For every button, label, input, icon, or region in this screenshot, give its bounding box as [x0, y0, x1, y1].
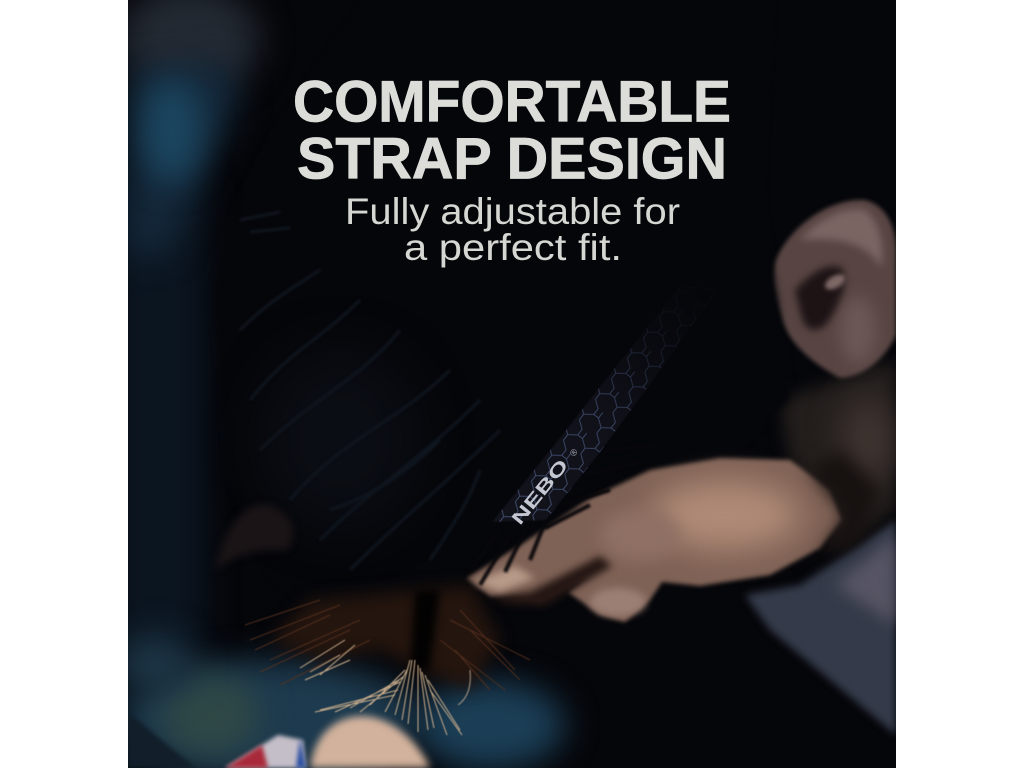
- shirt, lower right: [745, 520, 896, 735]
- hair tips, brown: [245, 585, 530, 690]
- subtitle line 2: a perfect fit.: [404, 227, 622, 268]
- subtitle: [345, 191, 680, 268]
- headband logo: NEBO: [508, 455, 572, 529]
- headband: [477, 287, 712, 587]
- ear: [773, 200, 896, 378]
- blurred blue background, upper left: [110, 0, 260, 660]
- neck and beard shadow: [780, 360, 896, 550]
- hair: [217, 211, 789, 579]
- hair tips, golden strands: [300, 640, 470, 735]
- registered mark: ®: [568, 447, 580, 458]
- photo panel: [110, 0, 896, 768]
- title: [294, 80, 730, 180]
- hand and flag, bottom: [225, 716, 430, 768]
- title line 2: STRAP DESIGN: [297, 126, 727, 192]
- subtitle line 1: Fully adjustable for: [345, 191, 680, 232]
- blurred table and gear, lower left: [115, 635, 565, 768]
- title line 1: COMFORTABLE: [293, 70, 731, 134]
- photo background: [128, 0, 896, 768]
- face: [466, 450, 880, 622]
- infographic canvas: [128, 0, 896, 768]
